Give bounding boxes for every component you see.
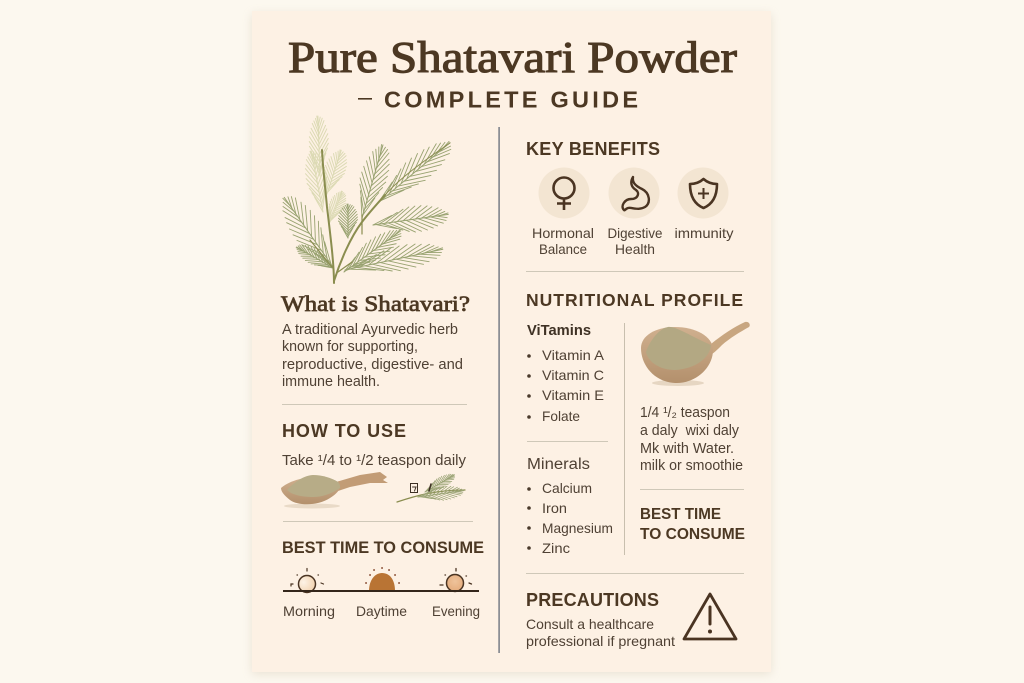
chart: time of day suns: [283, 568, 480, 619]
description text: [282, 322, 463, 390]
list: minerals: Minerals: [527, 456, 590, 473]
illustration: shatavari plant: [273, 116, 458, 283]
list: vitamins: Folate: [542, 408, 580, 424]
icon: daytime sun: [366, 568, 399, 591]
heading: best time to consume (right): [640, 506, 745, 543]
heading: best time to consume (right): BEST TIME: [640, 506, 721, 523]
list: vitamins: [527, 322, 605, 424]
benefit: hormonal balance: [532, 168, 594, 257]
benefit: immunity: [674, 168, 734, 241]
usage text: a daly wixi daly: [640, 423, 740, 439]
precautions text: [526, 616, 675, 649]
list: vitamins: ViTamins: [527, 322, 591, 339]
section: precautions: [526, 590, 736, 649]
benefit: digestive health: [608, 168, 663, 257]
icon: stomach: [623, 177, 649, 210]
heading: nutritional profile: NUTRITIONAL PROFILE: [526, 290, 743, 310]
precautions text: Consult a healthcare: [526, 616, 654, 632]
description text: A traditional Ayurvedic herb: [282, 322, 458, 338]
list: minerals: [527, 456, 613, 556]
icon: warning triangle: [684, 594, 736, 639]
labels: times of day: Daytime: [356, 603, 407, 619]
icon: female symbol: [554, 178, 574, 210]
description text: immune health.: [282, 374, 380, 390]
benefit: hormonal balance: Hormonal: [532, 225, 594, 241]
list: minerals: Magnesium: [542, 520, 613, 536]
description text: known for supporting,: [282, 339, 418, 355]
precautions text: professional if pregnant: [526, 633, 675, 649]
subtitle: COMPLETE GUIDE: [384, 86, 638, 112]
heading: precautions: PRECAUTIONS: [526, 590, 659, 610]
usage text: milk or smoothie: [640, 458, 743, 474]
timeline baseline: [283, 590, 479, 592]
labels: times of day: Morning: [283, 603, 335, 619]
list: vitamins: Vitamin E: [542, 387, 604, 403]
icon: wooden spoon with powder: [281, 472, 388, 508]
icon: wooden bowl with powder: [641, 322, 750, 386]
paper card: [252, 11, 771, 674]
usage text: Mk with Water.: [640, 441, 734, 457]
icon: evening sun: [440, 568, 472, 592]
usage text: [640, 405, 743, 474]
panel divider: [498, 127, 500, 653]
list: minerals: Calcium: [542, 480, 592, 496]
heading: best time to consume: BEST TIME TO CONSUME: [282, 539, 484, 557]
benefit: immunity: immunity: [674, 225, 734, 241]
benefit: digestive health: Health: [615, 241, 655, 257]
heading: how to use: HOW TO USE: [282, 421, 406, 441]
section: what is shatavari: [281, 291, 470, 390]
benefit: digestive health: Digestive: [608, 225, 663, 241]
dosage text: Take ¹/4 to ¹/2 teaspon daily: [282, 453, 467, 469]
heading: what is shatavari: What is Shatavari?: [281, 291, 470, 316]
heading: best time to consume (right): TO CONSUME: [640, 526, 745, 543]
labels: times of day: [283, 603, 480, 619]
labels: times of day: Evening: [432, 603, 480, 619]
usage text: 1/4 ¹/₂ teaspon: [640, 405, 730, 421]
benefit: hormonal balance: Balance: [539, 241, 587, 257]
title: Pure Shatavari Powder: [288, 33, 737, 82]
heading: key benefits: KEY BENEFITS: [526, 139, 660, 159]
list: vitamins: Vitamin C: [542, 367, 604, 383]
list: minerals: Iron: [542, 500, 567, 516]
icon: morning sun: [291, 568, 324, 592]
list: minerals: Zinc: [542, 540, 570, 556]
list: vitamins: Vitamin A: [542, 347, 605, 363]
icon: small sprig: [397, 470, 465, 504]
description text: reproductive, digestive- and: [282, 357, 463, 373]
icon: shield with plus: [690, 179, 717, 208]
